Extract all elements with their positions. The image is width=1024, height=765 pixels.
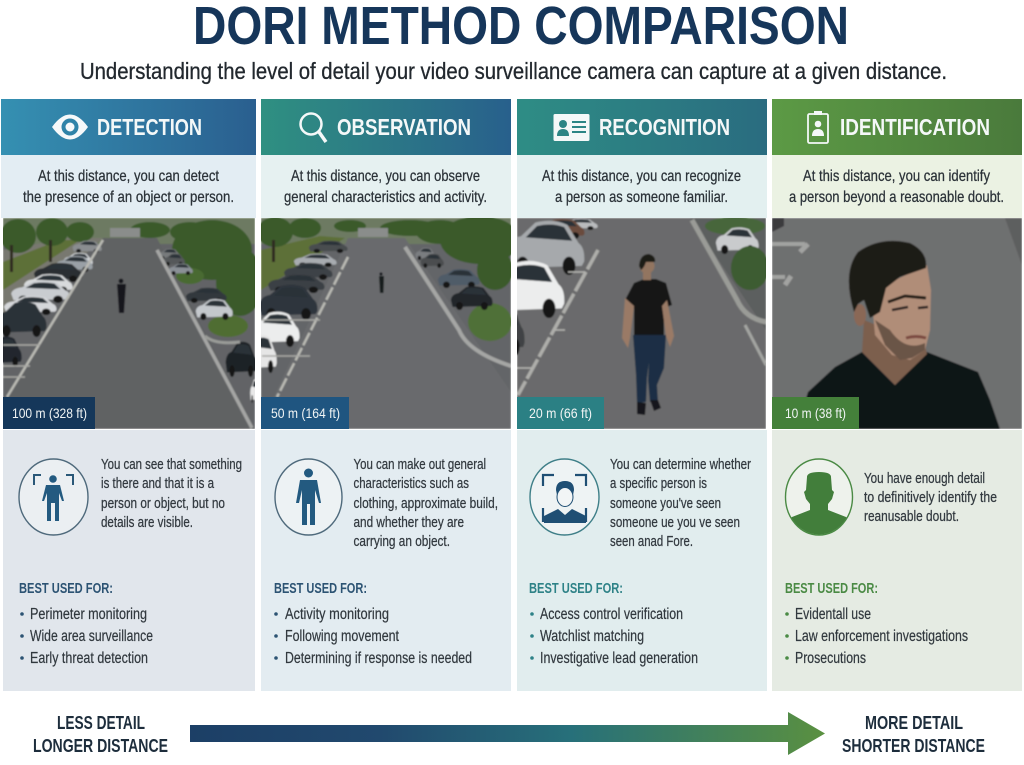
detection summary band [1, 155, 256, 218]
observation header bar [261, 99, 511, 155]
left scale label: LESS DETAIL [57, 713, 145, 733]
observation best used for: Activity monitoring [285, 606, 389, 623]
distance badge: 20 m [517, 397, 604, 429]
recognition description: You can determine whether [610, 457, 751, 473]
icon: id card [554, 114, 590, 141]
right scale label: MORE DETAIL [865, 713, 963, 733]
panel: identification [772, 99, 1022, 691]
detection best used for: BEST USED FOR: [19, 581, 113, 597]
recognition heading: RECOGNITION [599, 114, 730, 140]
observation heading: OBSERVATION [337, 114, 471, 140]
icon: person silhouette [275, 459, 342, 535]
recognition description: a specific person is [610, 476, 707, 492]
observation lower panel [261, 430, 511, 691]
identification header bar [772, 99, 1022, 155]
identification description: to definitively identify the [864, 490, 997, 506]
detection header bar [1, 99, 256, 155]
photo: person at 20 m [517, 218, 766, 429]
recognition header bar [517, 99, 767, 155]
identification best used for: Prosecutions [795, 650, 866, 667]
distance badge: 10 m [772, 397, 859, 429]
recognition best used for: Investigative lead generation [540, 650, 698, 667]
distance badge: 20 m: 20 m (66 ft) [529, 405, 592, 421]
distance badge: 100 m [3, 397, 95, 429]
left scale label [33, 713, 168, 756]
detection description [101, 457, 242, 531]
identification summary text [789, 168, 1004, 206]
photo: person at 50 m [246, 216, 520, 429]
icon: eye [52, 114, 88, 140]
identification best used for: Law enforcement investigations [795, 628, 968, 645]
detection best used for: Perimeter monitoring [30, 606, 147, 623]
icon: id badge [808, 111, 828, 143]
observation best used for: Following movement [285, 628, 400, 645]
observation best used for: Determining if response is needed [285, 650, 472, 667]
identification heading: IDENTIFICATION [840, 114, 990, 140]
identification description [864, 471, 997, 525]
photo: person at 100 m [0, 218, 264, 429]
recognition description: someone ue you ve seen [610, 515, 740, 531]
detection description: You can see that something [101, 457, 242, 473]
recognition best used for: Watchlist matching [540, 628, 644, 645]
observation description [354, 457, 498, 550]
distance badge: 50 m [261, 397, 349, 429]
distance badge: 50 m: 50 m (164 ft) [271, 405, 340, 421]
identification summary band [772, 155, 1022, 218]
identification lower panel [772, 430, 1022, 691]
icon: head silhouette [784, 458, 854, 536]
distance badge: 100 m: 100 m (328 ft) [12, 405, 87, 421]
recognition description [610, 457, 751, 550]
recognition summary text [542, 168, 741, 206]
observation summary text: general characteristics and activity. [284, 189, 487, 206]
icon: face in frame [530, 459, 599, 535]
recognition best used for: BEST USED FOR: [529, 581, 623, 597]
identification best used for [785, 581, 968, 667]
identification best used for: Evidentall use [795, 606, 871, 623]
recognition description: seen anad Fore. [610, 534, 693, 550]
observation description: characteristics such as [354, 476, 469, 492]
panel: observation [246, 99, 520, 691]
recognition best used for [529, 581, 698, 667]
detection best used for: Early threat detection [30, 650, 148, 667]
observation summary text: At this distance, you can observe [291, 168, 480, 185]
observation description: carrying an object. [354, 534, 450, 550]
left scale label: LONGER DISTANCE [33, 736, 168, 756]
recognition lower panel [517, 430, 767, 691]
panel: recognition [517, 99, 767, 691]
icon: magnifying glass [300, 114, 326, 142]
identification best used for: BEST USED FOR: [785, 581, 878, 597]
arrow: less to more detail [190, 712, 825, 755]
observation summary band [261, 155, 511, 218]
detection best used for: Wide area surveillance [30, 628, 153, 645]
observation best used for: BEST USED FOR: [274, 581, 367, 597]
detection summary text: the presence of an object or person. [23, 189, 234, 206]
detection summary text: At this distance, you can detect [38, 168, 219, 185]
recognition summary text: a person as someone familiar. [555, 189, 728, 206]
detection description: is there and that it is a [101, 476, 215, 492]
observation description: and whether they are [354, 515, 464, 531]
detection summary text [23, 168, 234, 206]
recognition summary band [517, 155, 767, 218]
detection description: person or object, but no [101, 496, 225, 512]
recognition summary text: At this distance, you can recognize [542, 168, 741, 185]
right scale label [842, 713, 985, 756]
recognition best used for: Access control verification [540, 606, 683, 623]
detection lower panel [3, 430, 255, 691]
identification description: reanusable doubt. [864, 509, 959, 525]
observation summary text [284, 168, 487, 206]
recognition description: someone you've seen [610, 496, 721, 512]
observation description: clothing, approximate build, [354, 496, 498, 512]
panel: detection [0, 99, 264, 691]
observation best used for [274, 581, 472, 667]
icon: person in frame [19, 459, 88, 535]
detection description: details are visible. [101, 515, 193, 531]
photo: head and shoulders at 10 m [772, 218, 1022, 429]
identification description: You have enough detail [864, 471, 985, 487]
right scale label: SHORTER DISTANCE [842, 736, 985, 756]
detection heading: DETECTION [97, 114, 202, 140]
observation description: You can make out general [354, 457, 486, 473]
detection best used for [19, 581, 153, 667]
distance badge: 10 m: 10 m (38 ft) [785, 405, 846, 421]
